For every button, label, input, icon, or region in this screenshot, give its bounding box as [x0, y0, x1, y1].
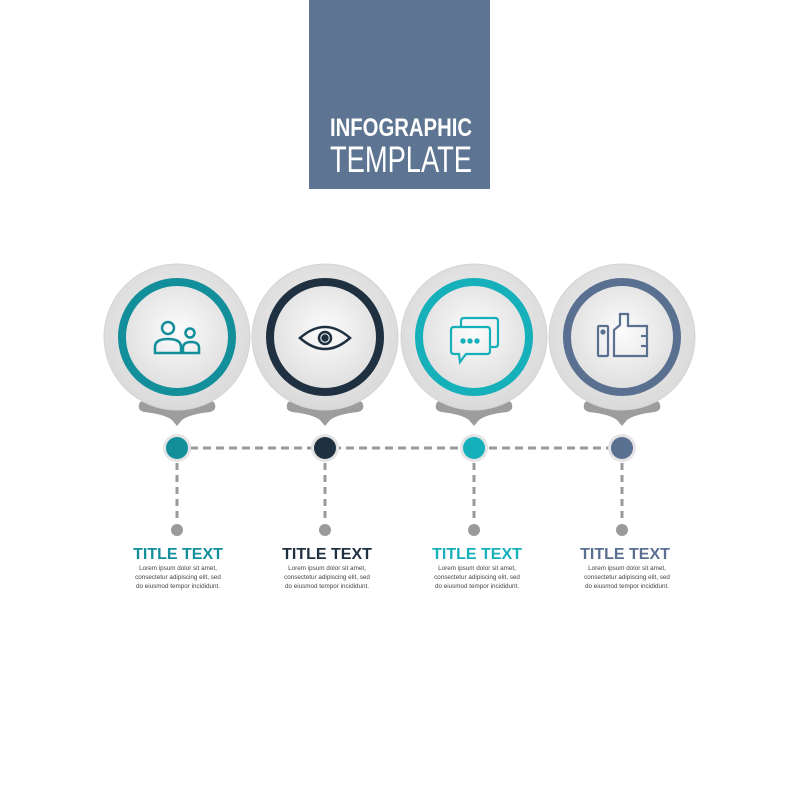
- timeline dashed line: [190, 446, 610, 450]
- title text 1: TITLE TEXT: [133, 546, 223, 563]
- step 2: Lorem ipsum dolor sit amet,: [288, 565, 366, 572]
- step 3: [401, 264, 547, 590]
- step 4: Lorem ipsum dolor sit amet,: [588, 565, 666, 572]
- title text 2: TITLE TEXT: [282, 546, 372, 563]
- step 3: consectetur adipiscing elit, sed: [434, 574, 520, 581]
- step 1: do eiusmod tempor incididunt.: [136, 583, 220, 590]
- step 2: [252, 264, 398, 590]
- title text 3: TITLE TEXT: [432, 546, 522, 563]
- title: infographic: INFOGRAPHIC: [330, 114, 472, 142]
- icon: eye: [300, 327, 350, 349]
- icon: thumbs up: [598, 314, 647, 356]
- step 3: do eiusmod tempor incididunt.: [435, 583, 519, 590]
- step 2: consectetur adipiscing elit, sed: [284, 574, 370, 581]
- step 4: [549, 264, 695, 590]
- title text 4: TITLE TEXT: [580, 546, 670, 563]
- step 2: do eiusmod tempor incididunt.: [285, 583, 369, 590]
- step 1: Lorem ipsum dolor sit amet,: [139, 565, 217, 572]
- step 1: consectetur adipiscing elit, sed: [135, 574, 221, 581]
- step 3: Lorem ipsum dolor sit amet,: [438, 565, 516, 572]
- icon: chat: [451, 318, 498, 362]
- subtitle: template: TEMPLATE: [330, 139, 472, 180]
- icon: users: [155, 322, 199, 353]
- step 1: [104, 264, 250, 590]
- header box: [309, 0, 490, 189]
- step 4: do eiusmod tempor incididunt.: [585, 583, 669, 590]
- step 4: consectetur adipiscing elit, sed: [584, 574, 670, 581]
